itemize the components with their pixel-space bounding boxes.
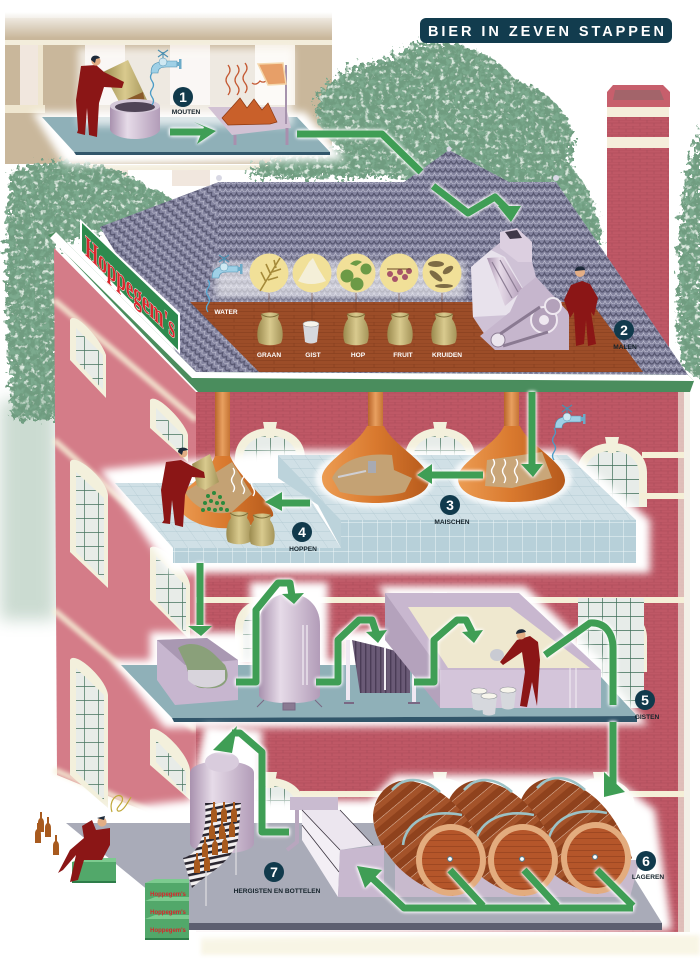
mash pot: [110, 99, 160, 139]
step 3-4 halo: [100, 392, 650, 573]
green eave: [48, 232, 694, 392]
side windows: [70, 318, 190, 808]
left tree: [6, 161, 178, 420]
main roof: [100, 146, 690, 378]
water stream 2: [206, 280, 210, 312]
spice icon: [428, 261, 455, 288]
right tree: [677, 128, 700, 380]
step 1 badge: 1: [179, 89, 187, 105]
cream stripes: [54, 300, 196, 832]
steam lines: [226, 63, 268, 95]
heat lamp: [258, 63, 286, 124]
milling machine: [471, 228, 569, 350]
fruit icon: [387, 268, 412, 282]
step 3 badge: [440, 495, 460, 515]
object halos: [150, 582, 610, 672]
Hoppegem's sign: Hoppegem's: [85, 228, 175, 346]
arrow: malt to mill: [297, 134, 521, 222]
water tap: [212, 255, 242, 278]
step 2 badge: 2: [620, 322, 628, 338]
haze on roof: [215, 262, 465, 298]
lower platform: [115, 455, 341, 563]
arrow: strainer to tank: [236, 583, 304, 682]
left wall of main building: [54, 248, 196, 832]
title pill: BIER IN ZEVEN STAPPEN: [428, 24, 664, 40]
step 4 badge: 4: [298, 524, 306, 540]
dizzy squiggle: [111, 795, 131, 812]
floor plate: [121, 665, 637, 722]
beer crates: [145, 879, 189, 940]
beer crates: Hoppegem's: [150, 928, 187, 934]
base strip: [201, 935, 700, 955]
arrow: tub to barrels: [604, 722, 625, 797]
arrow: into kettle: [521, 392, 543, 477]
platform plate: [42, 117, 330, 155]
hop sack poured: [192, 454, 219, 490]
malt heap: [222, 98, 277, 125]
worker: [76, 56, 124, 137]
arrow: kettle 2 to 1: [265, 492, 310, 511]
step 5 label: GISTEN: [635, 714, 660, 721]
white glow behind apparatus: [78, 48, 293, 126]
step 5 badge: [635, 690, 655, 710]
hop sacks: [226, 512, 275, 546]
step 4 badge: [292, 522, 312, 542]
plate filter: [344, 640, 420, 703]
ingredient labels: GIST: [305, 352, 321, 359]
copper pipes: [215, 392, 519, 458]
kettle 2: [322, 426, 429, 503]
water stream 3: [552, 428, 556, 460]
falling hops: [201, 491, 229, 512]
background building with windows: [5, 12, 335, 186]
arrow: tub outward: [545, 623, 613, 705]
yeast icon: [298, 258, 326, 284]
chimney: [607, 85, 670, 357]
ground floor: [35, 722, 700, 955]
lagering filter: [287, 797, 384, 897]
bottling tank: [190, 752, 254, 854]
step 2 label: MALEN: [613, 344, 637, 351]
step 5 floor: [112, 563, 660, 728]
floor 1: mouten: [32, 48, 345, 165]
kettle 3: [458, 426, 565, 502]
step 1 label: MOUTEN: [172, 109, 201, 116]
arrow: tank to filter: [316, 620, 387, 682]
hop icon: [340, 260, 372, 290]
arrow: kettle 3 to 2: [417, 464, 483, 484]
halo: [50, 725, 672, 938]
raised platform: [278, 455, 636, 563]
empty bottles: [35, 812, 59, 855]
hop strainer: [157, 638, 238, 705]
barrels: [373, 778, 632, 896]
step 6 badge: [636, 851, 656, 871]
wooden deck: [190, 302, 643, 372]
step 2 badge: [614, 320, 634, 340]
arrow: down to strainer: [188, 563, 212, 636]
grain icon: [260, 258, 281, 291]
step 7 badge: 7: [270, 864, 278, 880]
sacks: [257, 312, 457, 345]
water stream: [150, 73, 154, 105]
floor plate: [66, 823, 662, 930]
step 3 badge: 3: [446, 497, 454, 513]
cream bands: [196, 452, 684, 797]
arrow: filter to bottling: [213, 726, 289, 832]
glow around kettles: [315, 448, 572, 508]
worker 2: [564, 266, 598, 346]
storage tank: [257, 594, 322, 710]
arched windows row 3: [235, 772, 635, 842]
ingredient labels: GRAAN: [257, 352, 281, 359]
right-hand window tall pane: [578, 598, 644, 708]
step 3 label: MAISCHEN: [434, 519, 470, 526]
step 7 label: HERGISTEN EN BOTTELEN: [234, 888, 321, 895]
ingredient row: [206, 254, 462, 359]
floor plate halo: [112, 660, 648, 728]
arched windows row 2: [235, 592, 647, 672]
fermenting tub: [385, 593, 601, 708]
barrel cradle: [395, 860, 640, 897]
sack pouring: [103, 60, 147, 113]
small arrow: [170, 122, 216, 144]
arched windows row 1: [235, 422, 647, 507]
kiln table: [208, 107, 291, 145]
big tree behind the roof: [248, 42, 601, 250]
beer crates: Hoppegem's: [150, 892, 187, 898]
connector lines: [269, 293, 442, 322]
worker 4: [161, 448, 205, 527]
ingredient discs: [250, 254, 462, 292]
front brick facade: [196, 392, 690, 932]
tap 2: [555, 405, 586, 428]
yeast buckets: [471, 687, 516, 716]
Hoppegem's sign: [80, 219, 180, 354]
worker 5: [490, 629, 540, 707]
beer crates: Hoppegem's: [150, 910, 187, 916]
ingredient labels: [257, 352, 462, 359]
step 1 badge: [173, 87, 193, 107]
soft fade of left tree: [0, 400, 56, 620]
ingredient labels: FRUIT: [393, 352, 413, 359]
arrow: barrels to filter: [357, 866, 633, 908]
drinking man on crate: [58, 816, 116, 883]
step 5 badge: 5: [641, 692, 649, 708]
ingredient labels: KRUIDEN: [432, 352, 462, 359]
kettle 1: [178, 456, 273, 528]
step 4 label: HOPPEN: [289, 546, 317, 553]
step 6 label: LAGEREN: [632, 874, 664, 881]
step 7 badge: [264, 862, 284, 882]
ingredient labels: HOP: [351, 352, 366, 359]
tap: [151, 50, 182, 73]
bottling conveyor: [183, 802, 241, 906]
arrow: filter to tub: [414, 620, 483, 682]
title pill: [420, 18, 672, 43]
water label: WATER: [214, 309, 238, 316]
step 6 badge: 6: [642, 853, 650, 869]
yeast bucket: [303, 321, 319, 344]
